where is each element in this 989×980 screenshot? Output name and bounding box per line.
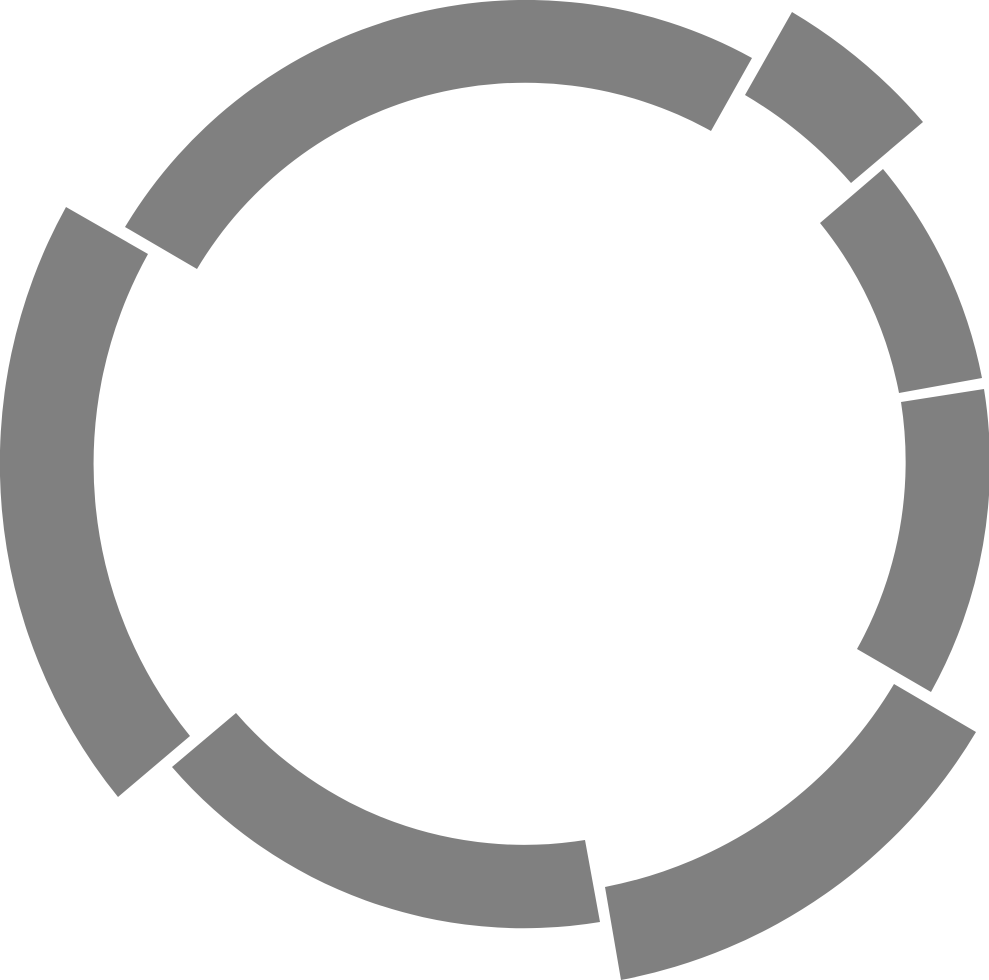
ring segment: right lower arc (857, 389, 989, 692)
ring segment: right upper arc (820, 169, 982, 393)
ring segment: top arc (125, 0, 752, 269)
ring segment: bottom arc (172, 713, 600, 928)
ring segment: upper right short arc (745, 12, 923, 183)
ring segment: lower right arc (605, 684, 976, 980)
ring segment: left arc (0, 207, 190, 797)
